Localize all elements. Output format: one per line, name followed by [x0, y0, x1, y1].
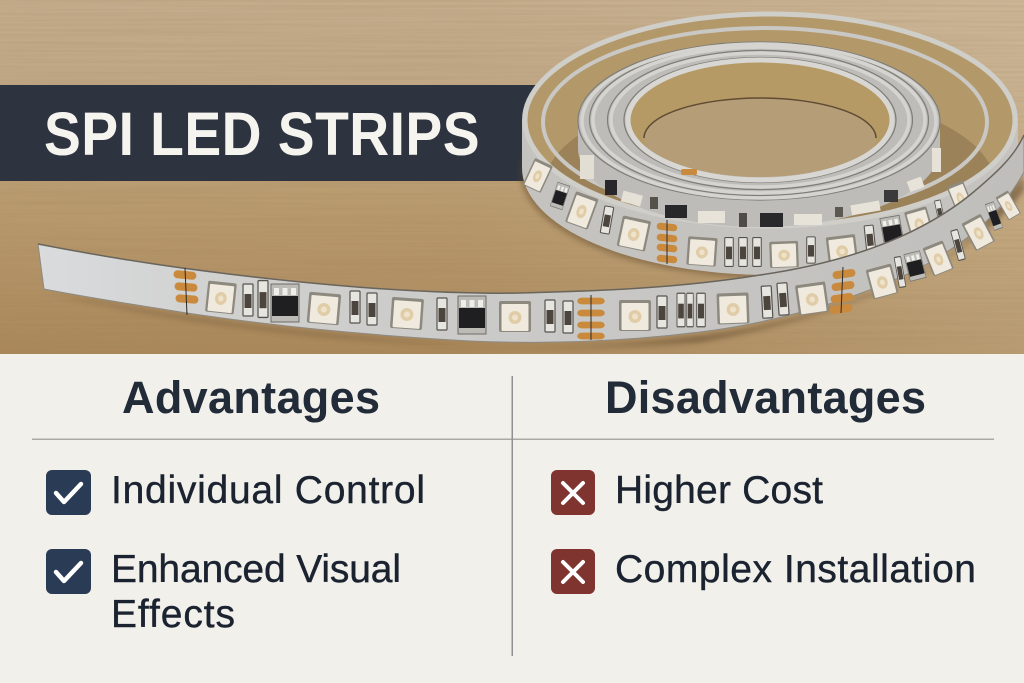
strip shadow [44, 176, 1024, 347]
heading: advantages: Advantages [122, 372, 380, 423]
coiled LED strip [520, 13, 1020, 280]
text: enhanced visual effects: Effects [111, 593, 235, 636]
icon: check [46, 470, 91, 515]
panel: disadvantages [551, 372, 976, 594]
LEDs and chips on strip [205, 190, 1021, 334]
outer coil floor [550, 123, 990, 220]
icon: check [46, 549, 91, 594]
innermost adhesive wall [630, 61, 890, 177]
horizontal divider [32, 438, 994, 440]
inner coil chips [580, 148, 941, 227]
inner coil band lines [578, 42, 940, 200]
text: enhanced visual effects: Enhanced Visual [111, 548, 401, 591]
title: SPI LED STRIPS [44, 100, 480, 168]
wood table background [0, 0, 1024, 354]
inner coil silver rims [582, 44, 936, 198]
strip body [38, 135, 1024, 342]
front LED strip [38, 135, 1024, 347]
second coil rim [543, 28, 987, 216]
bottom panel [0, 354, 1024, 683]
text: higher cost: Higher Cost [615, 469, 823, 512]
vertical divider [512, 376, 513, 656]
heading: disadvantages: Disadvantages [605, 372, 926, 423]
icon: cross [551, 470, 595, 515]
innermost rim [628, 60, 892, 180]
outer coil adhesive backing [524, 14, 1016, 226]
text: complex installation: Complex Installation [615, 548, 976, 591]
text: individual control: Individual Control [111, 469, 425, 512]
text: enhanced visual effects [111, 548, 401, 636]
title banner [0, 85, 542, 181]
outer coil silver body [522, 13, 1018, 275]
strip top edge [38, 135, 1024, 293]
panel: advantages [46, 372, 425, 636]
solder pads right [829, 267, 856, 315]
solder pads middle [577, 295, 605, 340]
inner coil silver stack [578, 42, 940, 227]
front band components [523, 158, 974, 268]
coil shadow [520, 66, 1020, 278]
center wood floor [644, 98, 876, 178]
outer coil rim [525, 14, 1015, 226]
solder pads left [173, 268, 199, 315]
icon: cross [551, 549, 595, 594]
